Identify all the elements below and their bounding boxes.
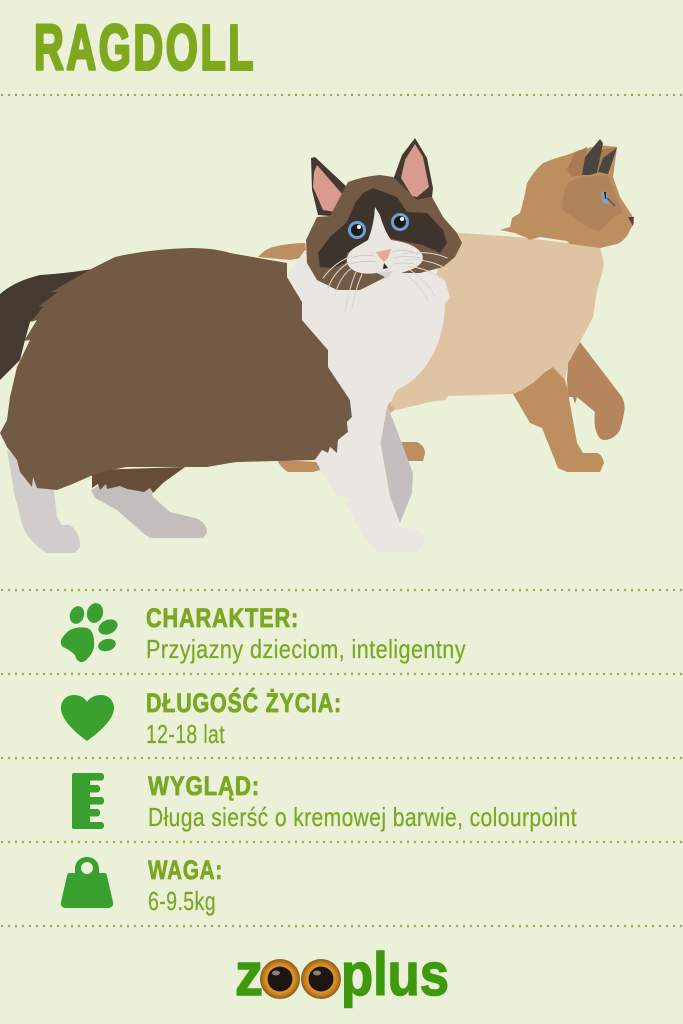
row: długość życia: [61, 687, 342, 749]
logo: zooplus: plus: [341, 941, 449, 1008]
mouth: [383, 263, 388, 269]
logo: zooplus: [235, 941, 449, 1008]
nose: [376, 249, 391, 262]
icon: paw: [61, 601, 120, 662]
row: charakter: [61, 601, 466, 664]
tail: [0, 269, 92, 380]
title: RAGDOLL: [34, 12, 256, 84]
text: charakter: Przyjazny dzieciom, inteligentny: [146, 634, 466, 664]
icon: weight: [61, 857, 113, 908]
row: wygląd: [72, 771, 577, 832]
hind legs: [7, 450, 207, 553]
text: wygląd: Długa sierść o kremowej barwie, colourpoint: [148, 802, 577, 832]
muzzle lines: [350, 250, 420, 264]
face fur: [306, 175, 462, 290]
illustration: ragdoll cat: [0, 138, 462, 553]
left ear: [311, 157, 348, 216]
text: długość życia: 12-18 lat: [146, 719, 225, 749]
text: waga: 6-9.5kg: [148, 886, 216, 916]
dark mask: [318, 188, 447, 268]
head: [500, 145, 634, 248]
body: [0, 248, 352, 490]
raised leg: [567, 342, 625, 440]
icon: comb: [72, 773, 104, 829]
body: [390, 232, 604, 410]
logo: zooplus: z: [235, 941, 263, 1008]
heading: waga: WAGA:: [148, 855, 223, 885]
heading: wygląd: WYGLĄD:: [148, 771, 260, 801]
heading: długość życia: DŁUGOŚĆ ŻYCIA:: [146, 687, 342, 718]
white muzzle: [347, 207, 423, 278]
eye right: [391, 213, 409, 231]
head: [306, 138, 462, 312]
right ear: [393, 138, 433, 200]
heading: charakter: CHARAKTER:: [146, 603, 299, 633]
far front leg: [380, 407, 413, 523]
whiskers: [323, 253, 448, 312]
illustration: cream colourpoint cat: [258, 139, 634, 472]
eye left: [348, 221, 366, 239]
white chest and leg: [287, 250, 450, 552]
row: waga: [61, 855, 223, 916]
icon: heart: [61, 695, 114, 741]
standing leg: [513, 367, 604, 472]
chin: [378, 271, 393, 279]
